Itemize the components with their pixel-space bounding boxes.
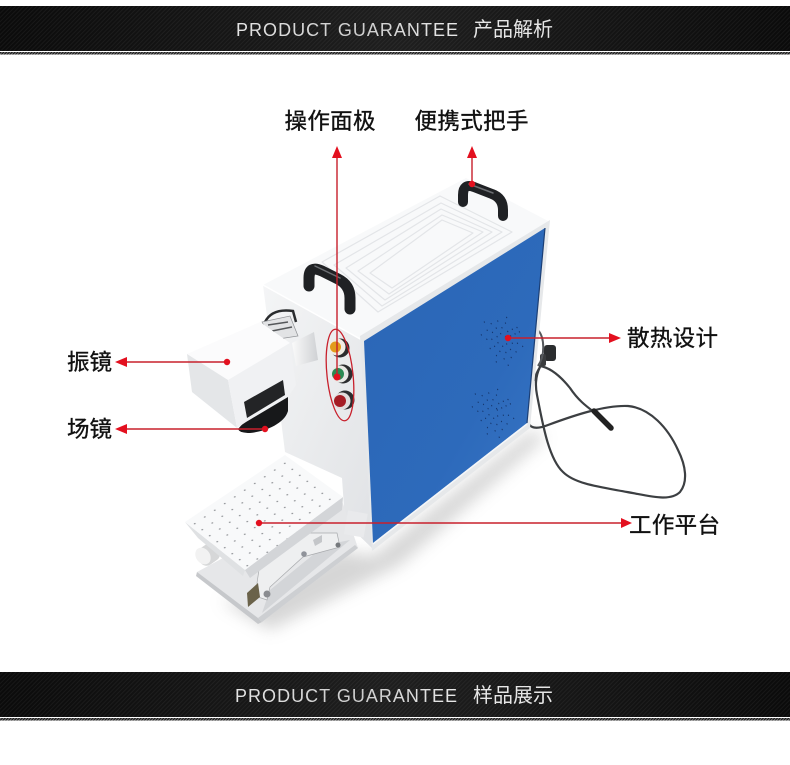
label: 工作平台 with arrow: 工作平台 bbox=[629, 508, 720, 540]
orange indicator bbox=[328, 338, 350, 358]
green button bbox=[332, 364, 352, 384]
label: 散热设计 with arrow bbox=[505, 321, 718, 353]
machine top face bbox=[263, 178, 550, 340]
banner: sample display: 样品展示 bbox=[473, 679, 553, 708]
label: 振镜 with arrow: 振镜 bbox=[67, 345, 112, 377]
ventilation holes lower bbox=[464, 380, 522, 444]
label: 工作平台 with arrow bbox=[256, 508, 720, 540]
label: 振镜 with arrow bbox=[67, 345, 230, 377]
field lens bbox=[238, 396, 288, 433]
callout: control panel ellipse bbox=[322, 328, 358, 422]
platform top bbox=[185, 455, 343, 578]
machine left panel and column bbox=[263, 222, 550, 550]
label: 操作面极 with arrow bbox=[284, 104, 376, 380]
floor shadow bbox=[220, 430, 545, 630]
banner: product analysis: 产品解析 bbox=[473, 13, 553, 42]
work platform base bbox=[196, 495, 358, 624]
power plug bbox=[538, 330, 556, 366]
galvo head bbox=[187, 322, 296, 433]
power cables bbox=[527, 366, 685, 497]
ventilation holes upper bbox=[473, 308, 531, 372]
banner: sample display: PRODUCT GUARANTEE bbox=[235, 686, 457, 706]
blue side panel bbox=[360, 220, 550, 551]
fibre cable and mount bbox=[262, 310, 318, 366]
control buttons bbox=[328, 338, 354, 410]
label: 操作面极 with arrow: 操作面极 bbox=[284, 104, 376, 136]
banner: product analysis bbox=[0, 6, 790, 54]
scissor lift mechanism bbox=[247, 510, 368, 607]
label: 场镜 with arrow: 场镜 bbox=[67, 412, 112, 444]
label: 散热设计 with arrow: 散热设计 bbox=[627, 321, 718, 353]
laser marking machine photo bbox=[185, 178, 685, 630]
label: 场镜 with arrow bbox=[67, 412, 268, 444]
lens slot bbox=[244, 380, 285, 418]
rear handle bbox=[463, 184, 503, 216]
cooling ripple lines bbox=[322, 196, 512, 312]
banner: sample display bbox=[0, 672, 790, 720]
label: 便携式把手 with arrow: 便携式把手 bbox=[414, 104, 528, 136]
adjustment knob bbox=[192, 540, 223, 569]
label: 便携式把手 with arrow bbox=[414, 104, 528, 187]
red button bbox=[334, 390, 354, 410]
banner: product analysis: PRODUCT GUARANTEE bbox=[236, 20, 458, 40]
front handle bbox=[309, 266, 350, 309]
